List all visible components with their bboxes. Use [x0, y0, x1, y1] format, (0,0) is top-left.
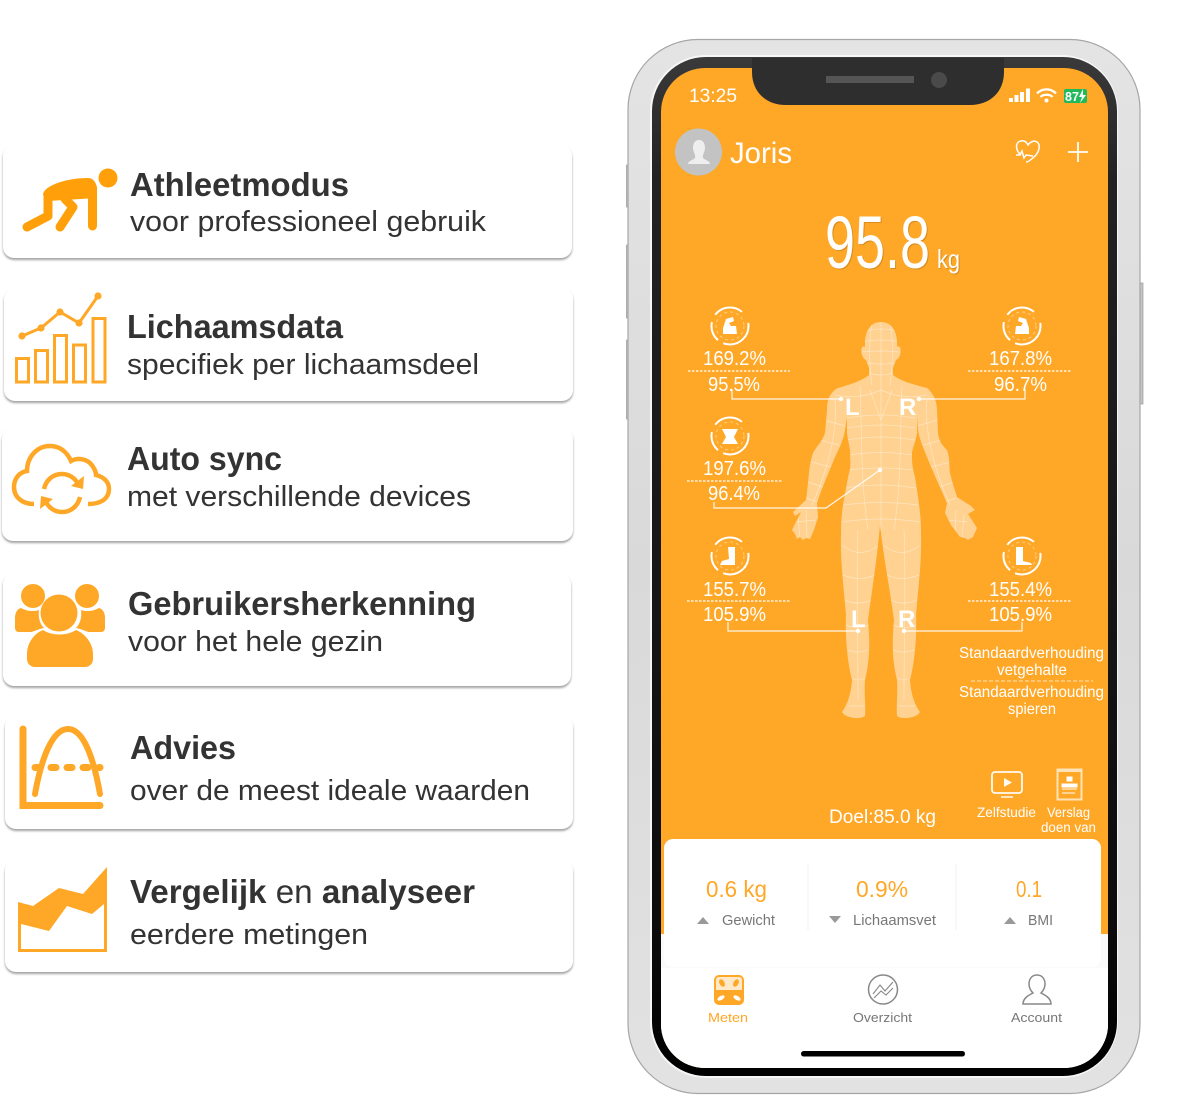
stat: BMI	[1004, 876, 1053, 929]
weight unit: kg	[937, 244, 960, 274]
weight value: 95.8	[825, 201, 930, 284]
label: Verslag doen van: Verslag	[1047, 805, 1090, 820]
tab: Meten: Meten	[708, 1010, 748, 1025]
icon: tutorial screen	[992, 772, 1022, 797]
text: 155.7%: 155.7%	[703, 579, 766, 601]
text: 155.4%: 155.4%	[989, 579, 1052, 601]
stat: body fat	[829, 876, 936, 929]
user name: Joris	[730, 137, 792, 170]
heading: Gebruikersherkenning: Gebruikersherkenning	[128, 585, 476, 622]
legend: standard ratios: vetgehalte	[997, 662, 1067, 679]
body figure	[792, 322, 977, 718]
goal weight: Doel:85.0 kg	[829, 807, 936, 828]
text: 95.5%: 95.5%	[708, 374, 760, 396]
callout: right leg	[898, 538, 1071, 633]
icon: left arm ring	[712, 308, 748, 344]
icon: plus	[1068, 142, 1088, 162]
text: 167.8%: 167.8%	[989, 348, 1052, 370]
tab: Overzicht	[853, 975, 912, 1025]
icon: right arm ring	[1004, 308, 1040, 344]
panel: stats card	[664, 839, 1101, 967]
home indicator	[801, 1051, 965, 1056]
heading: Vergelijk en analyseer: Vergelijk en analyseer	[130, 873, 475, 910]
callout: right arm	[899, 308, 1071, 421]
stat: weight: 0.6 kg	[706, 876, 767, 902]
callout: left leg	[687, 538, 866, 633]
panel: Gebruikersherkenning card	[3, 573, 571, 686]
stat: weight	[697, 876, 775, 929]
text: eerdere metingen: eerdere metingen	[130, 919, 368, 951]
status bar time: 13:25	[689, 86, 737, 107]
legend: standard ratios: Standaardverhouding	[959, 645, 1104, 662]
stat: BMI: 0.1	[1016, 876, 1042, 902]
letter R lower: R	[898, 606, 915, 633]
text: specifiek per lichaamsdeel: specifiek per lichaamsdeel	[127, 349, 479, 381]
text: 96.7%: 96.7%	[994, 374, 1047, 396]
icon: area chart	[18, 867, 107, 952]
heading: Athleetmodus: Athleetmodus	[130, 166, 349, 203]
icon: torso ring	[712, 418, 748, 454]
icon: cloud with sync arrows	[14, 446, 109, 512]
heading: Auto sync: Auto sync	[127, 440, 282, 477]
text: 96.4%: 96.4%	[708, 483, 760, 505]
phone screen	[661, 68, 1108, 1068]
legend: standard ratios: spieren	[1008, 701, 1056, 718]
tab: Account: Account	[1011, 1010, 1062, 1025]
letter L: L	[845, 394, 860, 421]
icon: bell curve graph	[23, 729, 100, 806]
panel: Lichaamsdata card	[4, 288, 573, 401]
callout: left arm	[688, 308, 860, 421]
icon: group of three users	[15, 584, 105, 667]
icon: heart pulse	[1016, 141, 1039, 162]
stat: body fat: 0.9%	[856, 876, 908, 902]
phone frame	[628, 40, 1140, 1094]
heading: Lichaamsdata: Lichaamsdata	[127, 308, 344, 345]
legend: standard ratios: Standaardverhouding	[959, 684, 1104, 701]
status icons: 87	[1065, 90, 1079, 104]
avatar	[675, 128, 722, 176]
tab: Meten	[708, 975, 748, 1025]
panel: Vergelijk card	[5, 860, 573, 972]
tab: Overzicht: Overzicht	[853, 1010, 912, 1025]
label: Zelfstudie: Zelfstudie	[977, 805, 1036, 820]
panel: Athleetmodus card	[3, 145, 572, 258]
text: 169.2%: 169.2%	[703, 348, 766, 370]
icon: report document	[1057, 769, 1082, 800]
text: 105.9% left: 105.9%	[703, 604, 766, 626]
text: 105.9% right: 105.9%	[989, 604, 1052, 626]
label: Verslag doen van: doen van	[1041, 820, 1096, 835]
lower screen background	[661, 934, 1108, 1068]
text: voor professioneel gebruik: voor professioneel gebruik	[130, 206, 487, 238]
letter L lower: L	[851, 606, 866, 633]
icon: athlete in starting position	[27, 168, 118, 227]
icon: bar chart with trend line	[16, 292, 105, 382]
stat: BMI: BMI	[1028, 913, 1053, 929]
heading: Advies: Advies	[130, 729, 236, 766]
text: over de meest ideale waarden: over de meest ideale waarden	[130, 775, 530, 807]
stat: weight: Gewicht	[722, 913, 775, 929]
callout: torso	[687, 418, 882, 508]
text: 197.6%: 197.6%	[703, 458, 766, 480]
text: voor het hele gezin: voor het hele gezin	[128, 626, 383, 658]
side buttons	[626, 165, 1143, 419]
stat: body fat: Lichaamsvet	[853, 913, 936, 929]
tab: Account	[1011, 975, 1062, 1025]
label: Verslag doen van	[1041, 805, 1096, 835]
phone notch	[752, 58, 1004, 105]
panel: Advies card	[5, 716, 573, 829]
phone	[626, 40, 1143, 1094]
letter R: R	[899, 394, 916, 421]
panel: Auto sync card	[2, 428, 573, 541]
icon: left leg ring	[712, 538, 748, 574]
text: met verschillende devices: met verschillende devices	[127, 481, 471, 513]
legend: standard ratios	[959, 645, 1104, 718]
icon: right leg ring	[1004, 538, 1040, 574]
status icons	[1009, 88, 1087, 104]
